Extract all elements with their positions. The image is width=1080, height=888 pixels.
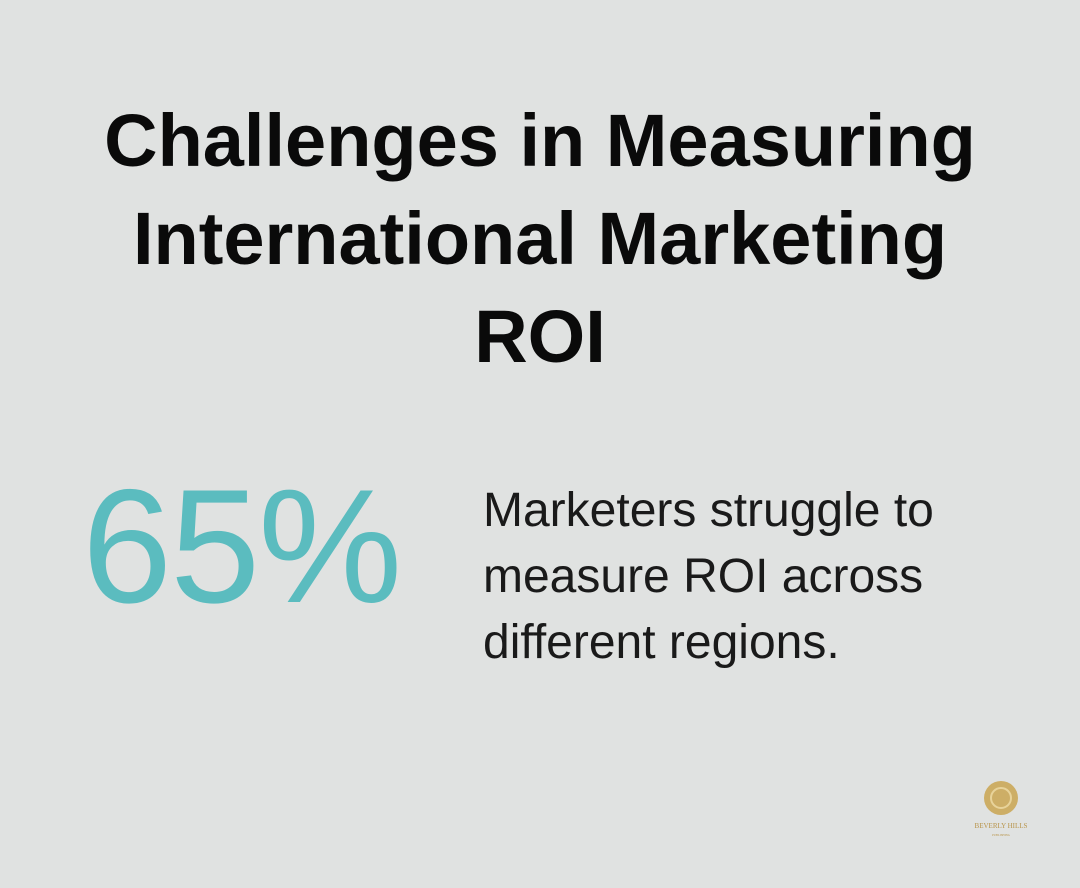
description: different regions.	[483, 616, 840, 669]
title: Challenges in Measuring	[104, 99, 976, 182]
description: Marketers struggle to	[483, 484, 934, 537]
big stat: 65%	[82, 456, 400, 637]
title	[104, 99, 976, 378]
logo: BEVERLY HILLS	[975, 822, 1028, 830]
logo	[974, 781, 1028, 837]
description	[483, 484, 934, 669]
title: ROI	[474, 295, 606, 378]
title: International Marketing	[133, 197, 947, 280]
logo: PUBLISHING	[992, 833, 1011, 837]
description: measure ROI across	[483, 550, 923, 603]
